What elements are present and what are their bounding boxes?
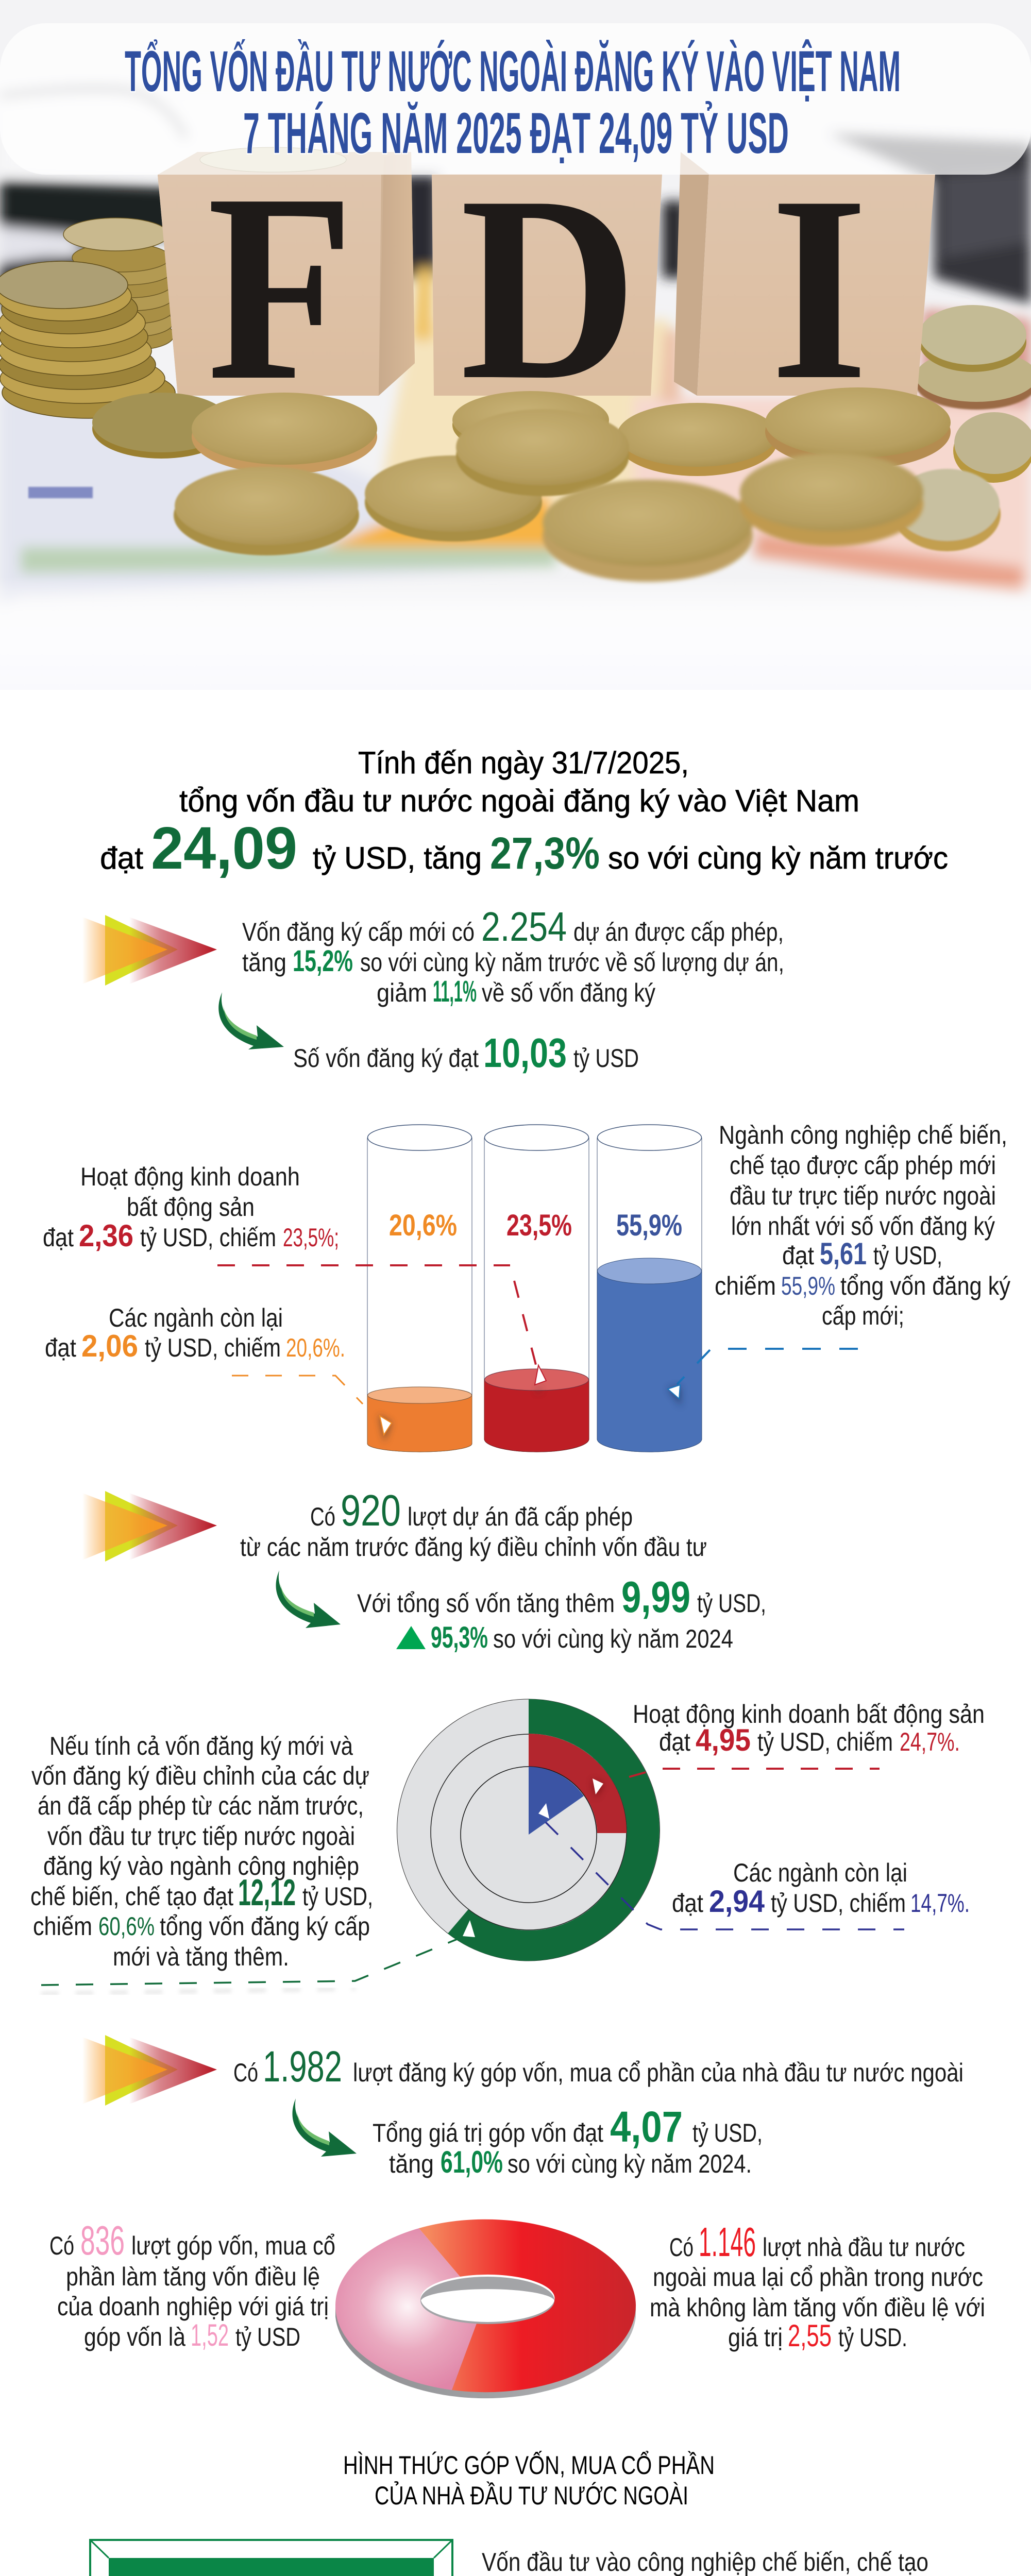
- text: 12,12 manufacturing: án đã cấp phép từ các năm trước,: [38, 1791, 364, 1820]
- text: registered capital 10,03: tỷ USD: [573, 1044, 639, 1073]
- heading: contribution forms: CỦA NHÀ ĐẦU TƯ NƯỚC NGOÀI: [375, 2481, 688, 2510]
- text: 12,12 manufacturing: tổng vốn đăng ký cấp: [160, 1912, 370, 1941]
- text: 9,99 added capital: tỷ USD,: [697, 1589, 766, 1618]
- text: 4,07 total: 4,07: [610, 2103, 683, 2151]
- text: real estate adjusted: 24,7%.: [900, 1727, 960, 1756]
- text: other sectors adjusted: tỷ USD, chiếm: [771, 1889, 906, 1918]
- text: 4,07 total: so với cùng kỳ năm 2024.: [508, 2149, 752, 2178]
- text: new registered capital: 15,2%: [293, 944, 353, 978]
- cylinder percent labels: 20,6%: [389, 1209, 457, 1242]
- text: real estate adjusted: 4,95: [696, 1723, 751, 1757]
- callout line: blue: [668, 1349, 858, 1406]
- icon: triple arrow 1: [82, 915, 217, 986]
- text: 4,07 total: tỷ USD,: [692, 2119, 763, 2147]
- text: 1.146 contributions: lượt nhà đầu tư nước: [763, 2233, 965, 2262]
- text: 12,12 manufacturing: vốn đầu tư trực tiếp nước ngoài: [47, 1822, 355, 1851]
- text: new registered capital: [242, 904, 784, 1008]
- callout line: navy: [538, 1803, 904, 1937]
- title: [125, 39, 901, 165]
- callout line: red: [217, 1265, 546, 1394]
- text: registered capital 10,03: Số vốn đăng ký đạt: [293, 1044, 479, 1073]
- text: 1.146 contributions: ngoài mua lại cổ phần trong nước: [653, 2263, 983, 2292]
- text: other sectors: đạt: [45, 1333, 76, 1362]
- icon: curved arrow 1: [218, 992, 284, 1049]
- text: 9,99 added capital: [357, 1573, 766, 1654]
- text: 9,99 added capital: so với cùng kỳ năm 2024: [493, 1624, 733, 1653]
- text: new registered capital: giảm: [377, 978, 427, 1007]
- text: real estate: 23,5%;: [283, 1223, 339, 1252]
- text: 12,12 manufacturing: chế biến, chế tạo đạt: [30, 1882, 233, 1911]
- text: 12,12 manufacturing: Nếu tính cả vốn đăng ký mới và: [49, 1732, 353, 1760]
- text: real estate adjusted: đạt: [659, 1727, 690, 1756]
- text: new registered capital: so với cùng kỳ năm trước về số lượng dự án,: [360, 948, 784, 977]
- text: other sectors: 2,06: [81, 1329, 138, 1363]
- text: 836 contributions: Có: [49, 2231, 74, 2260]
- text: 4,07 total: tăng: [389, 2149, 434, 2178]
- text: 12,12 manufacturing: đăng ký vào ngành công nghiệp: [43, 1852, 359, 1880]
- cylinder percent labels: 23,5%: [506, 1209, 572, 1242]
- text: manufacturing: 55,9%: [781, 1272, 835, 1300]
- headline summary: tổng vốn đầu tư nước ngoài đăng ký vào Việt Nam: [179, 784, 859, 818]
- text: 1.982 contributions: [233, 2042, 964, 2091]
- wooden block F: F: [207, 138, 354, 436]
- text: manufacturing: cấp mới;: [822, 1301, 904, 1330]
- title panel: [0, 23, 1031, 175]
- headline summary: [100, 745, 948, 882]
- ring: green 60,6%: [448, 1699, 660, 1961]
- cylinder chart: [367, 1125, 702, 1452]
- callout line: orange: [232, 1376, 392, 1443]
- icon: curved arrow 2: [276, 1570, 341, 1628]
- text: manufacturing: chiếm: [715, 1272, 776, 1300]
- callout line: red 2: [593, 1769, 880, 1798]
- text: 836 contributions: góp vốn là: [84, 2323, 185, 2351]
- headline summary: so với cùng kỳ năm trước: [608, 841, 948, 875]
- text: manufacturing: tỷ USD,: [873, 1241, 942, 1270]
- text: 4,07 total: Tổng giá trị góp vốn đạt: [373, 2119, 603, 2147]
- headline summary: đạt: [100, 841, 143, 875]
- text: real estate adjusted: Hoạt động kinh doanh bất động sản: [633, 1700, 985, 1728]
- text: 836 contributions: 836: [80, 2217, 125, 2263]
- text: 1.146 contributions: giá trị: [728, 2323, 783, 2352]
- text: 9,99 added capital: Với tổng số vốn tăng thêm: [357, 1589, 615, 1618]
- text: new registered capital: Vốn đăng ký cấp mới có: [242, 918, 475, 946]
- text: 4,07 total: 61,0%: [441, 2145, 503, 2179]
- text: registered capital 10,03: 10,03: [483, 1030, 567, 1076]
- coin on block: [200, 147, 346, 172]
- text: manufacturing: đạt: [782, 1241, 814, 1270]
- headline summary: 24,09: [151, 815, 297, 882]
- text: real estate adjusted: [633, 1700, 985, 1757]
- coin stack left: [0, 261, 175, 418]
- cylinder percent labels: 55,9%: [616, 1209, 682, 1242]
- text: manufacturing: 5,61: [820, 1236, 867, 1271]
- heading: contribution forms: HÌNH THỨC GÓP VỐN, MUA CỔ PHẦN: [343, 2450, 715, 2480]
- icon: curved arrow 3: [293, 2098, 357, 2157]
- donut side: [335, 2304, 636, 2398]
- text: real estate: 2,36: [79, 1218, 133, 1253]
- callout line: green: [41, 1920, 475, 1994]
- text: real estate: tỷ USD, chiếm: [140, 1223, 276, 1252]
- wooden block F: [158, 138, 415, 436]
- text: 836 contributions: phần làm tăng vốn điều lệ: [66, 2262, 320, 2291]
- text: real estate: bất động sản: [127, 1193, 255, 1222]
- text: 1.982 contributions: Có: [233, 2058, 258, 2087]
- text: 12,12 manufacturing: vốn đăng ký điều chỉnh của các dự: [31, 1761, 369, 1790]
- text: 1.146 contributions: 2,55: [788, 2318, 832, 2353]
- text: manufacturing form: Vốn đầu tư vào công nghiệp chế biến, chế tạo: [482, 2548, 928, 2576]
- headline summary: Tính đến ngày 31/7/2025,: [358, 745, 689, 780]
- radial bar chart: [397, 1699, 660, 1961]
- text: 1.146 contributions: [650, 2219, 985, 2353]
- text: real estate: [43, 1162, 339, 1253]
- text: real estate: đạt: [43, 1223, 74, 1252]
- hero photo: FDI wooden blocks and coins: [0, 0, 1031, 690]
- text: real estate adjusted: tỷ USD, chiếm: [757, 1727, 893, 1756]
- cylinder percent labels: [389, 1209, 682, 1242]
- text: 12,12 manufacturing: mới và tăng thêm.: [113, 1942, 289, 1971]
- text: 920 adjusted projects: [240, 1486, 707, 1562]
- icon: triple arrow 2: [82, 1491, 217, 1562]
- text: new registered capital: tăng: [242, 948, 286, 977]
- text: 920 adjusted projects: từ các năm trước đăng ký điều chỉnh vốn đầu tư: [240, 1533, 707, 1562]
- text: 1.146 contributions: 1.146: [699, 2219, 756, 2265]
- cylinder: blue: [597, 1125, 702, 1452]
- text: registered capital 10,03: [293, 1030, 639, 1076]
- text: 1.982 contributions: 1.982: [263, 2042, 342, 2091]
- text: 12,12 manufacturing: 60,6%: [98, 1912, 155, 1941]
- text: other sectors adjusted: đạt: [672, 1889, 703, 1918]
- text: other sectors: Các ngành còn lại: [109, 1303, 283, 1332]
- text: new registered capital: về số vốn đăng ký: [482, 978, 655, 1007]
- text: 12,12 manufacturing: 12,12: [238, 1872, 296, 1913]
- headline summary: 27,3%: [490, 828, 600, 878]
- heading: contribution forms: [343, 2450, 715, 2510]
- text: 836 contributions: [49, 2217, 335, 2352]
- text: 836 contributions: của doanh nghiệp với giá trị: [57, 2292, 329, 2321]
- text: other sectors adjusted: [672, 1858, 970, 1919]
- text: 920 adjusted projects: Có: [310, 1502, 335, 1531]
- text: new registered capital: 11,1%: [433, 975, 477, 1008]
- text: 12,12 manufacturing: [30, 1732, 373, 1971]
- ring: blue 14,7%: [529, 1767, 584, 1835]
- wooden block I: I: [770, 142, 868, 435]
- 3D donut chart: [335, 2219, 636, 2398]
- scattered coins: [92, 387, 1031, 483]
- text: 12,12 manufacturing: chiếm: [33, 1912, 92, 1941]
- text: manufacturing: [715, 1121, 1010, 1330]
- text: other sectors adjusted: 14,7%.: [910, 1889, 970, 1918]
- text: 836 contributions: 1,52: [191, 2318, 229, 2352]
- text: 12,12 manufacturing: tỷ USD,: [302, 1882, 373, 1911]
- cylinder: red: [484, 1125, 589, 1452]
- wooden block I: [674, 142, 935, 435]
- text: real estate: Hoạt động kinh doanh: [80, 1162, 300, 1191]
- text: 1.146 contributions: Có: [669, 2233, 694, 2262]
- donut slice: red: [419, 2219, 636, 2392]
- text: other sectors adjusted: Các ngành còn lại: [733, 1858, 907, 1887]
- text: new registered capital: dự án được cấp phép,: [573, 918, 784, 946]
- icon: triple arrow 3: [82, 2035, 217, 2106]
- text: manufacturing: tổng vốn đăng ký: [840, 1272, 1010, 1300]
- text: 836 contributions: lượt góp vốn, mua cổ: [131, 2231, 335, 2260]
- text: 9,99 added capital: 9,99: [621, 1573, 690, 1622]
- text: 920 adjusted projects: 920: [341, 1486, 401, 1535]
- text: 4,07 total: [373, 2103, 763, 2179]
- text: new registered capital: 2.254: [481, 904, 567, 950]
- text: other sectors adjusted: 2,94: [709, 1884, 765, 1919]
- ring: red 24,7%: [529, 1734, 627, 1833]
- donut slice: pink: [335, 2228, 477, 2390]
- headline summary: tỷ USD, tăng: [313, 841, 482, 875]
- text: other sectors: tỷ USD, chiếm: [145, 1333, 281, 1362]
- donut hole: [420, 2277, 554, 2324]
- text: 920 adjusted projects: lượt dự án đã cấp phép: [408, 1502, 633, 1531]
- text: other sectors: [45, 1303, 345, 1363]
- text: 836 contributions: tỷ USD: [235, 2323, 300, 2351]
- cylinder: orange: [367, 1125, 472, 1452]
- text: other sectors: 20,6%.: [286, 1333, 345, 1362]
- wooden block D: D: [460, 142, 637, 435]
- text: 9,99 added capital: 95,3%: [431, 1621, 488, 1654]
- box: green: [90, 2540, 452, 2576]
- text: 1.146 contributions: tỷ USD.: [838, 2323, 907, 2352]
